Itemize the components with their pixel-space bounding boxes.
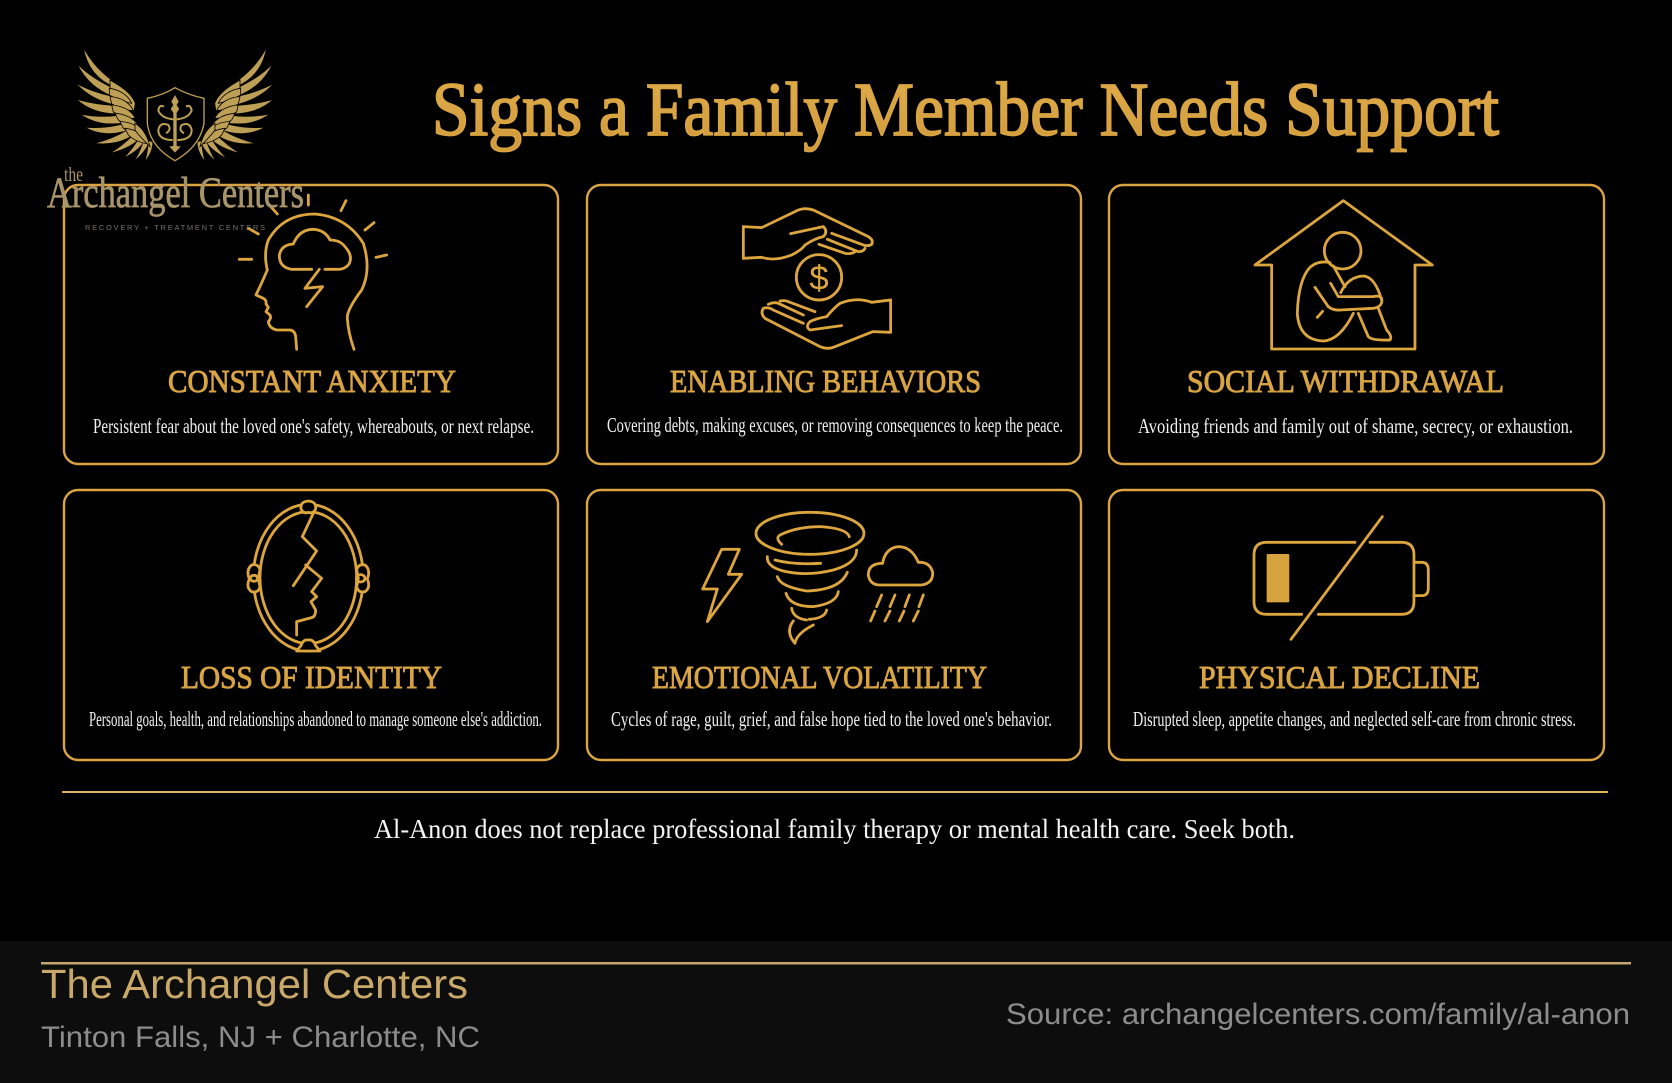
heading: EMOTIONAL VOLATILITY xyxy=(652,659,987,695)
icon: person huddled inside a house xyxy=(1255,201,1432,349)
source: Source: archangelcenters.com/family/al-anon xyxy=(1006,998,1630,1031)
footer rule xyxy=(41,962,1631,964)
card outline xyxy=(587,185,1081,464)
description: Personal goals, health, and relationships abandoned to manage someone else's addiction. xyxy=(89,707,542,731)
icon: hands around a dollar coin: $ xyxy=(809,260,829,298)
card outline xyxy=(64,185,558,464)
logo wordmark: Archangel Centers xyxy=(47,170,304,217)
heading: LOSS OF IDENTITY xyxy=(181,659,442,695)
divider xyxy=(62,791,1608,793)
panel: enabling behaviors xyxy=(587,185,1081,464)
icon: hands around a dollar coin xyxy=(743,209,891,348)
panel: constant anxiety xyxy=(64,185,558,464)
footer band xyxy=(0,941,1672,1083)
card outline xyxy=(1109,185,1604,464)
icon: head with storm cloud xyxy=(239,195,387,349)
panel: loss of identity xyxy=(64,490,558,760)
icon: cracked mirror with face profile xyxy=(248,501,369,651)
heading: SOCIAL WITHDRAWAL xyxy=(1187,363,1504,399)
description: Cycles of rage, guilt, grief, and false hope tied to the loved one's behavior. xyxy=(611,707,1052,731)
heading: ENABLING BEHAVIORS xyxy=(670,363,981,399)
icon: winged shield xyxy=(76,47,274,162)
logo tagline: RECOVERY + TREATMENT CENTERS xyxy=(85,223,265,232)
footer xyxy=(0,941,1672,1083)
organisation name: The Archangel Centers xyxy=(41,961,468,1007)
heading: PHYSICAL DECLINE xyxy=(1199,659,1480,695)
panel: social withdrawal xyxy=(1109,185,1604,464)
card outline xyxy=(587,490,1081,760)
icon: lightning, tornado and rain cloud xyxy=(703,512,933,643)
title: Signs a Family Member Needs Support xyxy=(432,68,1499,152)
logo: The Archangel Centers xyxy=(47,47,304,232)
icon: crossed-out low battery xyxy=(1254,517,1428,639)
description: Persistent fear about the loved one's safety, whereabouts, or next relapse. xyxy=(93,414,534,438)
panel: emotional volatility xyxy=(587,490,1081,760)
panel: physical decline xyxy=(1109,490,1604,760)
card outline xyxy=(1109,490,1604,760)
heading: CONSTANT ANXIETY xyxy=(168,363,456,399)
closing note: Al-Anon does not replace professional family therapy or mental health care. Seek both. xyxy=(374,814,1295,844)
description: Covering debts, making excuses, or removing consequences to keep the peace. xyxy=(607,413,1063,437)
locations: Tinton Falls, NJ + Charlotte, NC xyxy=(41,1021,480,1054)
card outline xyxy=(64,490,558,760)
logo word: the: the xyxy=(64,164,83,186)
